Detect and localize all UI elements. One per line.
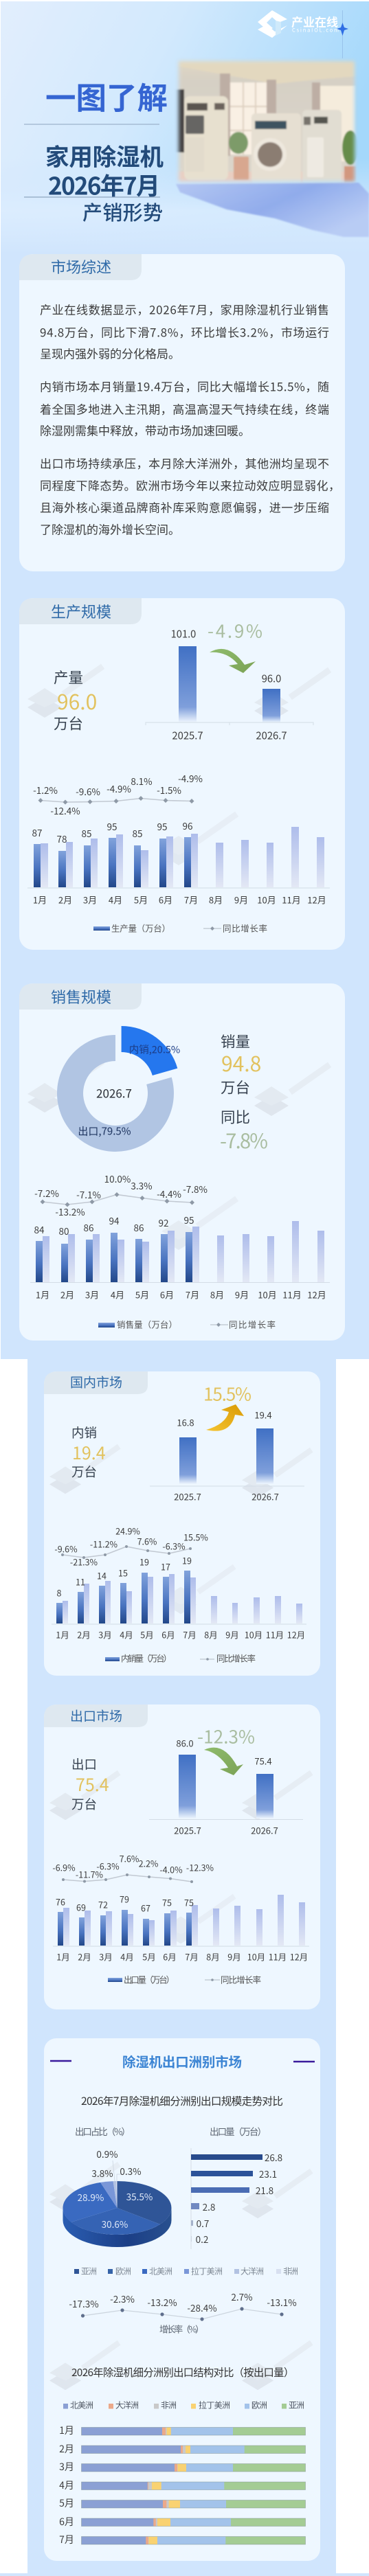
line chart: 同比增长率: 2.2% xyxy=(139,1857,159,1869)
heading tab: 出口市场 xyxy=(44,1705,148,1727)
line chart: growth rate by continent: -2.3% xyxy=(110,2292,135,2305)
line chart: 同比增长率 xyxy=(34,1172,208,1218)
bar chart: monthly domestic sales: 11 xyxy=(76,1575,85,1588)
panel: 除湿机出口洲别市场 xyxy=(44,2038,320,2561)
heading tab: 销售规模 xyxy=(19,983,142,1010)
line chart: 同比增长率: -7.1% xyxy=(76,1187,101,1201)
text block: overview: 了除湿机的海外增长空间。 xyxy=(40,521,180,537)
change value: 15.5%: 15.5% xyxy=(203,1380,251,1406)
bar chart: monthly domestic sales: 17 xyxy=(161,1560,170,1573)
panel: 出口市场 xyxy=(44,1705,320,2009)
heading tab: 生产规模: 生产规模 xyxy=(51,600,111,622)
bar chart: monthly domestic sales: 2月 xyxy=(77,1628,91,1641)
bar chart: monthly exports: 79 xyxy=(120,1893,129,1905)
line chart: 同比增长率: -4.9% xyxy=(107,782,131,795)
change value: -12.3%: -12.3% xyxy=(197,1724,255,1748)
bar chart: monthly exports: 75 xyxy=(184,1895,194,1909)
stat: 内销 19.4 万台: 19.4 xyxy=(72,1440,106,1465)
legend: continents: 拉丁美洲 xyxy=(191,2265,223,2277)
bar chart: monthly sales: 6月 xyxy=(160,1288,174,1301)
bar chart: monthly exports: 72 xyxy=(98,1898,108,1911)
text block: overview: 着全国多地进入主汛期，高温高湿天气持续在线，终端 xyxy=(40,400,329,418)
horizontal bar chart: export volume: 2.8 xyxy=(203,2200,215,2213)
line chart: 同比增长率: -13.2% xyxy=(55,1205,85,1218)
line chart: growth rate by continent: -17.3% xyxy=(69,2296,99,2310)
stat: 销量 94.8 万台: 94.8 xyxy=(221,1047,261,1078)
bar chart: monthly exports: 10月 xyxy=(247,1950,265,1963)
legend: 出口量（万台） xyxy=(124,1972,175,1986)
stacked bar chart: monthly structure: 6月 xyxy=(59,2515,74,2529)
text block: overview: 且海外核心渠道品牌商补库采购意愿偏弱，进一步压缩 xyxy=(40,499,329,515)
legend: continents xyxy=(74,2265,298,2277)
stat: 同比 -7.8%: -7.8% xyxy=(220,1126,268,1154)
bar chart: monthly exports: 3月 xyxy=(99,1950,113,1963)
donut chart: 内销 / 出口: 2026.7 xyxy=(96,1084,132,1102)
line chart: 同比增长率: -6.3% xyxy=(96,1860,120,1872)
legend xyxy=(105,1651,256,1665)
legend: 同比增长率 xyxy=(216,1651,256,1665)
line chart: 同比增长率: -7.2% xyxy=(34,1186,59,1200)
bar chart: monthly exports: 7月 xyxy=(185,1950,199,1963)
year comparison chart: 2026.7 xyxy=(251,1824,278,1836)
line chart: 同比增长率: -7.8% xyxy=(183,1182,208,1196)
bar chart: monthly sales: 95 xyxy=(184,1213,194,1227)
heading tab: 市场综述: 市场综述 xyxy=(51,255,111,277)
legend: 同比增长率 xyxy=(229,1317,276,1331)
bar chart: monthly domestic sales: 4月 xyxy=(120,1628,133,1641)
decorative star xyxy=(337,10,348,58)
line chart: 同比增长率: -9.6% xyxy=(76,784,100,798)
bar chart: monthly production: 11月 xyxy=(282,893,301,907)
line chart: growth rate by continent xyxy=(69,2290,297,2335)
year comparison chart: 2026.7 xyxy=(256,728,287,743)
year comparison chart: 2026.7 xyxy=(251,1490,279,1503)
text block: overview: 产业在线数据显示，2026年7月，家用除湿机行业销售 xyxy=(40,301,329,317)
bar chart: monthly domestic sales: 12月 xyxy=(287,1628,305,1641)
line chart: 同比增长率: -11.7% xyxy=(76,1868,104,1880)
bar chart: monthly sales: 4月 xyxy=(111,1288,124,1301)
bar chart: monthly exports: 8月 xyxy=(206,1950,220,1963)
horizontal bar chart: export volume: 0.7 xyxy=(197,2216,209,2230)
legend: continents: 非洲 xyxy=(283,2265,298,2277)
bar chart: monthly domestic sales: 5月 xyxy=(140,1628,154,1641)
right plant xyxy=(342,130,359,165)
line chart: growth rate by continent: -28.4% xyxy=(187,2301,217,2314)
washer xyxy=(251,113,301,184)
year comparison chart: 101.0 xyxy=(171,626,196,641)
legend xyxy=(108,1972,261,1986)
chart titles: 出口量（万台） xyxy=(210,2124,267,2138)
line chart: 同比增长率 xyxy=(52,1851,214,1883)
watermarks xyxy=(49,2162,313,2390)
bar chart: monthly domestic sales: 9月 xyxy=(225,1628,239,1641)
bar chart: monthly exports: 1月 xyxy=(56,1950,70,1963)
stacked bar chart: monthly structure: 7月 xyxy=(59,2533,74,2546)
text block: overview xyxy=(40,301,340,537)
watermarks xyxy=(49,1770,313,1944)
3D pie chart: export share: 35.5% xyxy=(126,2189,153,2203)
line chart: 同比增长率: -6.3% xyxy=(162,1540,186,1552)
bar chart: monthly sales: 2月 xyxy=(60,1288,74,1301)
bar chart: monthly production: 78 xyxy=(56,832,67,845)
year comparison chart xyxy=(146,626,313,743)
stat: 内销 19.4 万台 xyxy=(71,1424,106,1481)
stacked bar chart: monthly structure: 4月 xyxy=(59,2478,74,2492)
line chart: 同比增长率: 10.0% xyxy=(104,1172,131,1185)
bar chart: monthly exports xyxy=(53,1893,309,1963)
year comparison chart: 86.0 xyxy=(176,1736,194,1750)
line chart: 同比增长率: 7.6% xyxy=(137,1534,157,1548)
legend: 销售量（万台） xyxy=(117,1317,177,1331)
heading tab: 生产规模 xyxy=(19,598,142,624)
hero polygon shape xyxy=(176,183,369,237)
bar chart: monthly exports: 4月 xyxy=(120,1950,134,1963)
bar chart: monthly production: 7月 xyxy=(184,893,198,907)
left unit xyxy=(184,96,228,180)
line chart: 同比增长率: 7.6% xyxy=(120,1851,139,1865)
line chart: 同比增长率: -12.3% xyxy=(186,1861,214,1873)
bar chart: monthly production: 96 xyxy=(183,819,192,832)
horizontal bar chart: export volume: 26.8 xyxy=(265,2150,282,2164)
bar chart: monthly production: 95 xyxy=(107,819,117,833)
bar chart: monthly sales xyxy=(30,1213,330,1301)
plant xyxy=(229,132,248,154)
bar chart: monthly exports: 5月 xyxy=(142,1950,156,1963)
bar chart: monthly production xyxy=(27,819,330,907)
year comparison chart: 75.4 xyxy=(254,1754,272,1768)
bar chart: monthly sales: 1月 xyxy=(36,1288,49,1301)
bar chart: monthly domestic sales: 1月 xyxy=(56,1628,69,1641)
bar chart: monthly sales: 5月 xyxy=(135,1288,149,1301)
heading tab: 出口市场: 出口市场 xyxy=(70,1706,122,1725)
text block: overview: 94.8万台，同比下滑7.8%，环比增长3.2%，市场运行 xyxy=(40,323,329,341)
bar chart: monthly production: 4月 xyxy=(109,893,122,907)
legend: continents: 大洋洲 xyxy=(241,2265,264,2277)
line chart: growth rate by continent: 增长率（%） xyxy=(159,2323,204,2335)
legend xyxy=(98,1317,276,1331)
bar chart: monthly exports: 6月 xyxy=(163,1950,177,1963)
chart titles xyxy=(75,2124,267,2138)
bar chart: monthly sales: 11月 xyxy=(282,1288,302,1301)
bar chart: monthly production: 95 xyxy=(157,819,168,833)
stacked bar chart: monthly structure: 1月 xyxy=(59,2424,74,2437)
3D pie chart: export share: 0.9% xyxy=(96,2147,118,2161)
bar chart: monthly production: 5月 xyxy=(134,893,148,907)
text block: overview: 除湿刚需集中释放，带动市场加速回暖。 xyxy=(40,422,250,438)
horizontal bar chart: export volume xyxy=(191,2148,282,2249)
legend: stacked chart: 欧洲 xyxy=(251,2400,267,2410)
stat: 出口 75.4 万台: 万台 xyxy=(71,1795,97,1813)
bar chart: monthly domestic sales xyxy=(52,1553,306,1641)
legend: stacked chart: 亚洲 xyxy=(289,2400,304,2410)
stacked bar chart: monthly structure xyxy=(59,2424,305,2546)
legend: 内销量（万台） xyxy=(121,1651,172,1665)
line chart: 同比增长率: -1.5% xyxy=(157,783,181,797)
subtitle: 出口结构对比: 2026年除湿机细分洲别出口结构对比（按出口量） xyxy=(71,2364,294,2380)
bar chart: monthly exports: 76 xyxy=(56,1895,65,1908)
line chart: 同比增长率: 3.3% xyxy=(131,1178,153,1192)
stat: 产量 96.0 万台: 96.0 xyxy=(57,685,97,716)
bar chart: monthly sales: 84 xyxy=(34,1222,45,1236)
3D pie chart: export share xyxy=(63,2147,172,2247)
3D pie chart: export share: 30.6% xyxy=(102,2217,128,2231)
stat: 内销 19.4 万台: 内销 xyxy=(71,1424,97,1441)
logo xyxy=(258,10,339,38)
legend xyxy=(93,922,267,934)
bar chart: monthly sales: 10月 xyxy=(258,1288,277,1301)
bar chart: monthly sales: 12月 xyxy=(307,1288,326,1301)
line chart: 同比增长率: -12.4% xyxy=(50,803,80,817)
change value: -4.9%: -4.9% xyxy=(208,618,262,643)
bar chart: monthly domestic sales: 10月 xyxy=(245,1628,262,1641)
year comparison chart: 19.4 xyxy=(254,1408,272,1422)
logo: CsinaIOL.com xyxy=(292,26,339,34)
chart titles: 出口占比（%） xyxy=(75,2124,131,2138)
stacked bar chart: monthly structure: 5月 xyxy=(59,2496,74,2510)
bar chart: monthly domestic sales: 8月 xyxy=(204,1628,218,1641)
legend: 同比增长率 xyxy=(223,922,267,934)
bar chart: monthly sales: 86 xyxy=(133,1220,144,1234)
line chart: 同比增长率 xyxy=(33,771,203,817)
bar chart: monthly production: 6月 xyxy=(159,893,172,907)
subtitle: 家用除湿机 xyxy=(45,138,164,172)
stat: 出口 75.4 万台: 出口 xyxy=(71,1755,97,1773)
legend: stacked chart: 拉丁美洲 xyxy=(199,2400,230,2410)
bar chart: monthly exports: 11月 xyxy=(269,1950,287,1963)
line chart: 同比增长率: -4.0% xyxy=(159,1862,183,1876)
legend: continents: 北美洲 xyxy=(149,2265,172,2277)
text block: overview: 出口市场持续承压，本月除大洋洲外，其他洲均呈现不 xyxy=(40,455,329,471)
bar chart: monthly production: 12月 xyxy=(307,893,326,907)
heading tab: 国内市场 xyxy=(44,1371,148,1394)
bar chart: monthly production: 85 xyxy=(81,826,92,840)
subtitle: 出口规模走势对比: 2026年7月除湿机细分洲别出口规模走势对比 xyxy=(81,2093,283,2108)
legend: stacked chart: 北美洲 xyxy=(70,2400,93,2410)
bar chart: monthly sales: 86 xyxy=(84,1220,93,1234)
bar chart: monthly sales: 80 xyxy=(59,1224,69,1238)
bar chart: monthly domestic sales: 8 xyxy=(57,1586,62,1599)
bar chart: monthly sales: 3月 xyxy=(85,1288,99,1301)
line chart: 同比增长率: 24.9% xyxy=(115,1525,140,1537)
3D pie chart: export share: 28.9% xyxy=(78,2190,104,2204)
bar chart: monthly exports: 69 xyxy=(76,1901,86,1913)
3D pie chart: export share: 3.8% xyxy=(91,2166,113,2180)
bar chart: monthly exports: 2月 xyxy=(78,1950,91,1963)
stat: 内销 19.4 万台: 万台 xyxy=(71,1463,97,1481)
horizontal bar chart: export volume: 21.8 xyxy=(256,2183,273,2197)
right unit xyxy=(302,110,342,184)
line chart: growth rate by continent: 2.7% xyxy=(231,2290,253,2303)
watermarks xyxy=(49,1444,313,1614)
text block: overview: 呈现内强外弱的分化格局。 xyxy=(40,345,180,361)
subtitle: 2026年7月 xyxy=(48,168,160,202)
stacked bar chart: monthly structure: 2月 xyxy=(59,2442,74,2456)
subtitle: 产销形势 xyxy=(82,197,163,226)
year comparison chart xyxy=(150,1408,304,1503)
bar chart: monthly production: 8月 xyxy=(209,893,223,907)
legend: 生产量（万台） xyxy=(111,922,170,934)
panel: 生产规模 xyxy=(19,598,345,950)
line chart: 同比增长率: 8.1% xyxy=(131,774,153,788)
bar chart: monthly domestic sales: 11月 xyxy=(266,1628,284,1641)
bar chart: monthly domestic sales: 7月 xyxy=(183,1628,197,1641)
stat: 销量 94.8 万台: 销量 xyxy=(221,1030,250,1052)
year comparison chart: 96.0 xyxy=(262,672,281,685)
stacked bar chart: monthly structure: 3月 xyxy=(59,2460,74,2474)
stat: 同比 -7.8%: 同比 xyxy=(221,1106,250,1128)
bar chart: monthly production: 87 xyxy=(32,825,43,839)
bar chart: monthly exports: 9月 xyxy=(227,1950,241,1963)
bar chart: monthly production: 2月 xyxy=(58,893,72,907)
bar chart: monthly sales: 7月 xyxy=(186,1288,199,1301)
bar chart: monthly sales: 92 xyxy=(158,1216,169,1229)
legend: stacked chart: 大洋洲 xyxy=(115,2400,139,2410)
horizontal bar chart: export volume: 0.2 xyxy=(196,2232,208,2246)
heading tab: 国内市场: 国内市场 xyxy=(70,1372,122,1391)
hero header xyxy=(1,1,369,254)
legend: continents: 欧洲 xyxy=(115,2265,131,2277)
donut chart: 内销 / 出口 xyxy=(57,1026,180,1152)
line chart: 同比增长率 xyxy=(54,1525,208,1569)
hero photo: dehumidifiers in a room xyxy=(176,59,357,184)
horizontal bar chart: export volume: 23.1 xyxy=(259,2167,277,2180)
legend: stacked chart: 非洲 xyxy=(161,2400,177,2410)
bar chart: monthly production: 3月 xyxy=(83,893,97,907)
bar chart: monthly domestic sales: 14 xyxy=(97,1569,107,1582)
panel: 市场综述 xyxy=(19,254,345,571)
heading tab: 市场综述 xyxy=(19,254,142,280)
year comparison chart: 2025.7 xyxy=(174,1490,201,1503)
stat: 同比 -7.8% xyxy=(220,1106,268,1154)
3D pie chart: export share: 0.3% xyxy=(120,2164,142,2178)
logo: 产业在线 xyxy=(291,12,338,30)
line chart: 同比增长率: -6.9% xyxy=(52,1861,76,1873)
stat: 销量 94.8 万台: 万台 xyxy=(221,1077,250,1097)
subtitle xyxy=(24,138,164,226)
arrow: down xyxy=(210,649,256,673)
heading tab: 销售规模: 销售规模 xyxy=(51,985,111,1007)
year comparison chart: 16.8 xyxy=(177,1416,194,1428)
legend: stacked chart xyxy=(63,2400,304,2410)
bar chart: monthly exports: 67 xyxy=(141,1901,150,1915)
bar chart: monthly production: 85 xyxy=(132,826,143,840)
bar chart: monthly sales: 94 xyxy=(109,1213,120,1227)
legend: 同比增长率 xyxy=(221,1972,261,1986)
stat: 产量 96.0 万台 xyxy=(54,666,97,733)
line chart: growth rate by continent: -13.2% xyxy=(147,2295,177,2309)
donut chart: 内销 / 出口: 内销,20.5% xyxy=(129,1042,180,1056)
arrow: up xyxy=(206,1404,244,1431)
watermarks xyxy=(27,1059,331,1250)
bar chart: monthly domestic sales: 3月 xyxy=(98,1628,112,1641)
stat: 产量 96.0 万台: 产量 xyxy=(54,666,83,688)
panel: 销售规模 xyxy=(19,983,345,1341)
bar chart: monthly domestic sales: 19 xyxy=(139,1555,149,1569)
line chart: 同比增长率: -1.2% xyxy=(33,783,58,797)
stat: 出口 75.4 万台: 75.4 xyxy=(76,1772,109,1797)
year comparison chart: 2025.7 xyxy=(172,728,203,743)
legend: continents: 亚洲 xyxy=(81,2265,97,2277)
stat: 产量 96.0 万台: 万台 xyxy=(54,713,83,733)
line chart: 同比增长率: -4.4% xyxy=(157,1187,181,1200)
watermarks xyxy=(27,664,331,865)
line chart: 同比增长率: 15.5% xyxy=(183,1530,208,1544)
bar chart: monthly production: 9月 xyxy=(234,893,248,907)
bar chart: monthly domestic sales: 19 xyxy=(182,1553,192,1567)
bar chart: monthly exports: 12月 xyxy=(290,1950,308,1963)
bar chart: monthly exports: 75 xyxy=(162,1895,172,1909)
panel: 国内市场 xyxy=(44,1371,320,1676)
year comparison chart: 2025.7 xyxy=(174,1824,201,1836)
year comparison chart xyxy=(149,1736,303,1836)
text block: overview: 同程度下降态势。欧洲市场今年以来拉动效应明显弱化， xyxy=(40,477,340,493)
line chart: growth rate by continent: -13.1% xyxy=(267,2295,297,2309)
arrow: down xyxy=(204,1748,243,1775)
donut chart: 内销 / 出口: 出口,79.5% xyxy=(78,1124,131,1139)
bar chart: monthly sales: 8月 xyxy=(210,1288,224,1301)
bar chart: monthly sales: 9月 xyxy=(235,1288,249,1301)
bar chart: monthly production: 1月 xyxy=(33,893,47,907)
title: 一图了解: 一图了解 xyxy=(45,73,168,118)
text block: overview: 内销市场本月销量19.4万台，同比大幅增长15.5%，随 xyxy=(40,378,329,394)
heading: 除湿机出口洲别市场: 除湿机出口洲别市场 xyxy=(122,2051,242,2071)
stat: 出口 75.4 万台 xyxy=(71,1755,109,1813)
bar chart: monthly domestic sales: 6月 xyxy=(161,1628,175,1641)
bar chart: monthly domestic sales: 15 xyxy=(118,1566,128,1580)
stat: 销量 94.8 万台 xyxy=(221,1030,261,1097)
line chart: 同比增长率: -4.9% xyxy=(178,771,203,785)
line chart: 同比增长率: -21.3% xyxy=(70,1555,98,1569)
line chart: 同比增长率: -9.6% xyxy=(54,1542,78,1555)
bar chart: monthly production: 10月 xyxy=(257,893,276,907)
line chart: 同比增长率: -11.2% xyxy=(90,1537,118,1551)
